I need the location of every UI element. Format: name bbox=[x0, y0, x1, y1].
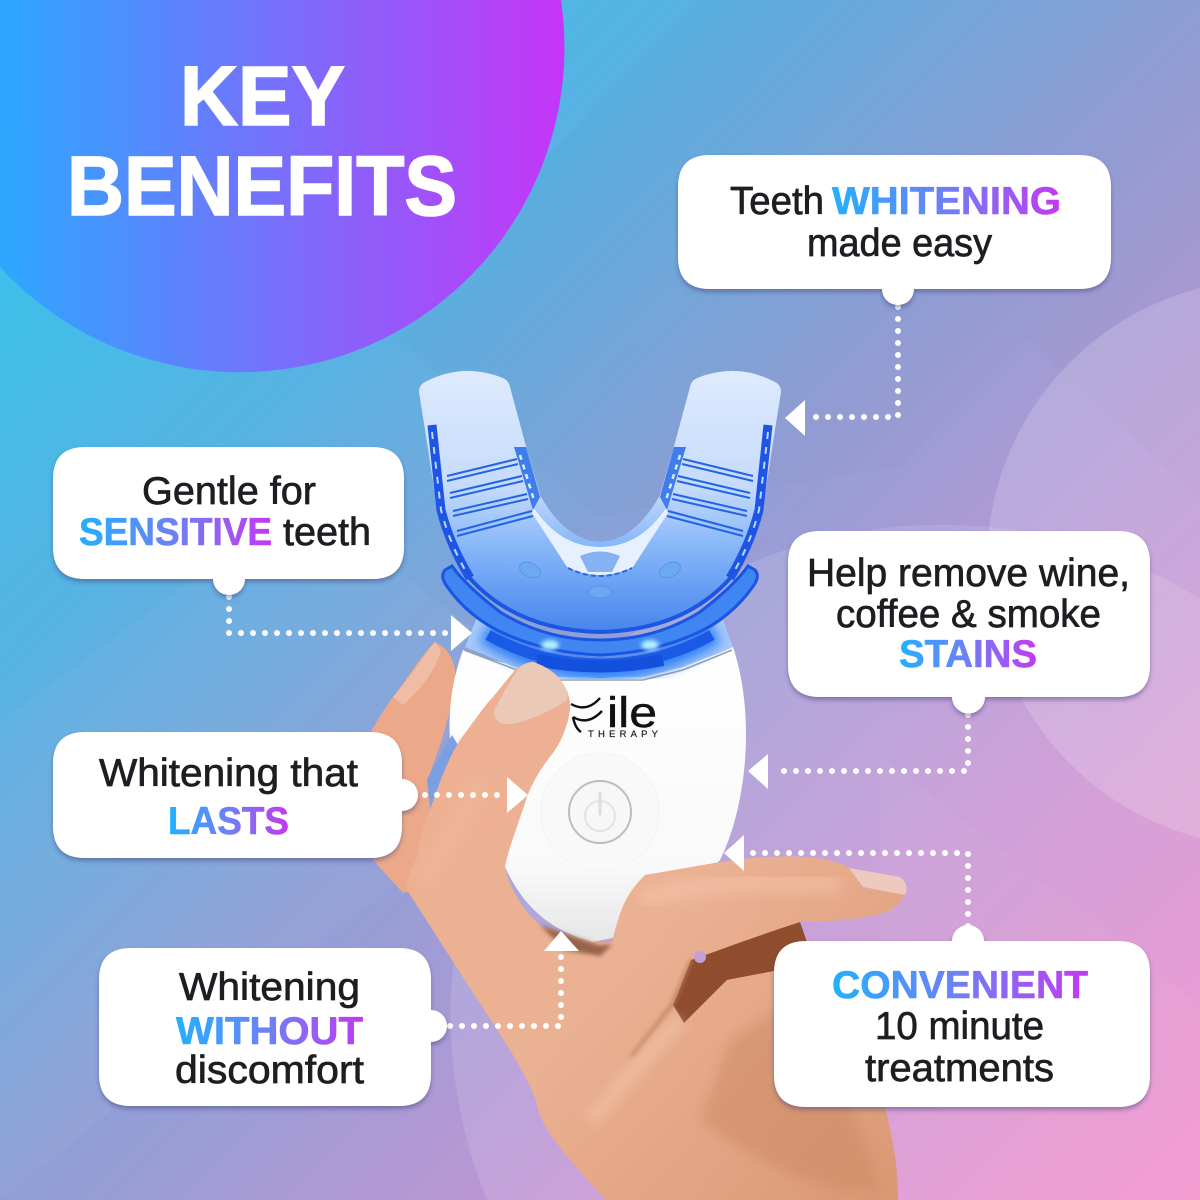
power button bbox=[541, 753, 659, 871]
callout: without discomfort bbox=[99, 948, 447, 1106]
connector: sensitive bbox=[229, 597, 472, 651]
illustration: hand holding whitening device bbox=[372, 371, 907, 1200]
callout: without discomfort: Whitening bbox=[179, 966, 360, 1009]
finger nail bbox=[849, 868, 907, 895]
callout: convenient: CONVENIENT bbox=[832, 964, 1088, 1007]
arrow bbox=[544, 931, 579, 951]
connector: convenient bbox=[724, 835, 968, 926]
callout: sensitive teeth bbox=[53, 447, 404, 595]
arrow bbox=[451, 615, 472, 651]
back finger bbox=[372, 642, 455, 893]
translucent collar bbox=[465, 617, 733, 677]
device body bbox=[450, 617, 746, 942]
callout: lasts: LASTS bbox=[168, 800, 289, 843]
LED dots bbox=[517, 559, 683, 598]
callout: convenient bbox=[774, 925, 1150, 1107]
callout: without discomfort: WITHOUT bbox=[176, 1010, 363, 1053]
callout: stains bbox=[788, 531, 1150, 714]
callout: teeth whitening: made easy bbox=[807, 222, 992, 265]
hand bbox=[407, 662, 907, 1200]
callout: teeth whitening bbox=[678, 155, 1111, 305]
logo: ile bbox=[607, 689, 657, 737]
connector: stains bbox=[748, 715, 968, 789]
collar wing bbox=[443, 566, 757, 655]
callout: teeth whitening: Teeth bbox=[730, 180, 824, 223]
logo bbox=[571, 689, 659, 740]
outer blue edges bbox=[432, 425, 768, 578]
thumb nail bbox=[494, 662, 567, 724]
callout: lasts bbox=[53, 732, 418, 858]
callout: lasts: Whitening that bbox=[99, 752, 358, 795]
callout: convenient: 10 minute bbox=[875, 1005, 1044, 1048]
connector: lasts bbox=[425, 777, 528, 813]
callout: stains: coffee & smoke bbox=[836, 593, 1101, 636]
arrow bbox=[507, 777, 528, 813]
blue light band bbox=[485, 632, 715, 668]
gap between fingers bbox=[694, 951, 706, 963]
title: BENEFITS bbox=[67, 139, 457, 233]
connector: without bbox=[450, 931, 579, 1026]
callout: sensitive teeth: SENSITIVE bbox=[79, 511, 272, 554]
callout: stains: STAINS bbox=[899, 633, 1037, 676]
back finger nail bbox=[393, 642, 441, 705]
callout: teeth whitening: WHITENING bbox=[832, 180, 1061, 223]
title: KEY bbox=[180, 49, 345, 143]
callout: sensitive teeth: Gentle for bbox=[142, 470, 316, 513]
callout: stains: Help remove wine, bbox=[807, 552, 1130, 595]
inner crystal bbox=[532, 508, 668, 575]
led highlights bbox=[541, 640, 659, 650]
title bbox=[67, 49, 457, 233]
logo smile bbox=[571, 698, 602, 732]
mouth tray bbox=[419, 371, 781, 632]
callout: convenient: treatments bbox=[865, 1047, 1054, 1090]
logo: THERAPY bbox=[588, 729, 659, 740]
arrow bbox=[748, 754, 768, 789]
connector: whitening bbox=[785, 307, 898, 436]
heading circle bbox=[0, 0, 564, 372]
arrow bbox=[785, 400, 805, 436]
tray stripes bbox=[447, 459, 753, 536]
inner blue strips bbox=[514, 447, 686, 510]
callout: without discomfort: discomfort bbox=[175, 1049, 364, 1092]
callout: sensitive teeth: teeth bbox=[283, 511, 371, 554]
arrow bbox=[724, 835, 744, 871]
hand shading bbox=[700, 1000, 880, 1190]
